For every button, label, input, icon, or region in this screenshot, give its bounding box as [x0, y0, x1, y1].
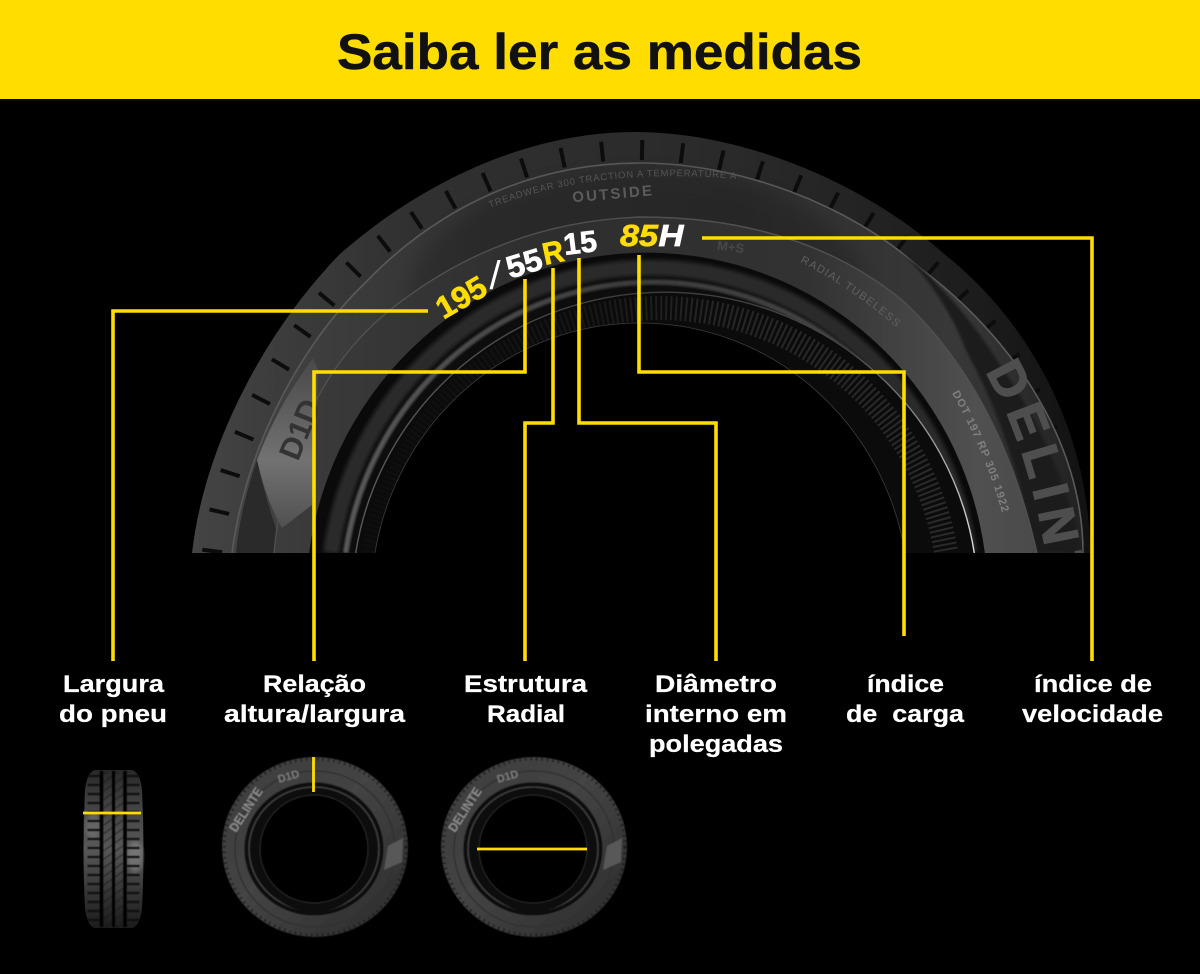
label: indice de carga: índice — [867, 671, 944, 698]
height line — [312, 757, 315, 792]
label: indice de velocidade — [1022, 671, 1163, 728]
line: estrutura — [525, 268, 553, 661]
label: diametro interno em polegadas — [645, 671, 787, 758]
tyre body — [222, 757, 408, 937]
size: 55: 55 — [502, 241, 546, 285]
rim inner gray band — [331, 268, 969, 553]
tyre body: DELINTE — [445, 784, 485, 835]
label: relacao altura/largura: altura/largura — [224, 701, 406, 728]
label: diametro interno em polegadas: Diâmetro — [655, 671, 777, 698]
top shading — [428, 261, 446, 281]
line: indice de carga — [639, 255, 904, 636]
line: relacao — [314, 279, 525, 661]
size code on sidewall — [430, 218, 684, 326]
label: diametro interno em polegadas: polegadas — [649, 731, 783, 758]
line: indice de velocidade — [702, 238, 1092, 661]
tyre body: D1D — [496, 768, 520, 786]
label: largura do pneu: Largura — [63, 671, 165, 698]
line: largura — [113, 311, 428, 661]
tread lugs — [212, 150, 1072, 553]
label: estrutura radial — [464, 671, 588, 728]
light wedge left — [257, 358, 318, 528]
line: diametro — [579, 258, 716, 661]
size: 15: 15 — [562, 225, 599, 262]
size: slash: / — [489, 254, 501, 298]
marking: D1D: D1D — [272, 394, 328, 465]
rim bright ring — [342, 278, 864, 553]
diameter line — [477, 848, 587, 850]
connector lines — [113, 238, 1092, 661]
shoulder highlights — [85, 812, 101, 840]
tyre body: D1D — [277, 768, 301, 786]
label: largura do pneu: do pneu — [59, 701, 167, 728]
icon: tyre side view with inner diameter line — [441, 757, 627, 937]
inner mesh liner — [518, 296, 958, 552]
label: relacao altura/largura: Relação — [263, 671, 366, 698]
size: H: H — [658, 218, 684, 253]
marking: treadwear: TREADWEAR 300 TRACTION A TEMPERATURE A — [488, 170, 736, 207]
rim second ring — [356, 292, 974, 553]
size: 195: 195 — [430, 269, 493, 326]
rim well — [309, 253, 985, 553]
marking: radial tubeless: RADIAL TUBELESS — [800, 256, 900, 326]
label: estrutura radial: Radial — [487, 701, 565, 728]
label: indice de velocidade: velocidade — [1022, 701, 1163, 728]
size: R: R — [539, 233, 567, 272]
size: 85: 85 — [620, 218, 659, 253]
tyre body: DELINTE — [226, 784, 266, 835]
label: relacao altura/largura — [224, 671, 406, 728]
title: Saiba ler as medidas — [337, 24, 862, 80]
tread pattern — [92, 771, 135, 927]
label: diametro interno em polegadas: interno em — [645, 701, 787, 728]
icon: tyre front view with width line — [83, 770, 144, 928]
main tyre arch photo — [192, 132, 1090, 553]
sidewall dark panel right — [902, 252, 1082, 553]
icon: tyre side view with sidewall height line — [222, 757, 408, 937]
tread band — [192, 132, 1090, 553]
label: largura do pneu — [59, 671, 167, 728]
tyre hole — [375, 323, 905, 553]
marking: dot code: DOT 197 RP 305 1922 — [952, 390, 1009, 512]
sidewall markings — [279, 170, 1082, 553]
marking: m+s: M+S — [716, 238, 745, 256]
label: indice de carga — [846, 671, 965, 728]
inner sidewall band — [274, 217, 1037, 553]
tyre body — [441, 757, 627, 937]
sidewall dark triangle left — [236, 460, 276, 553]
sidewall — [232, 163, 1083, 553]
label: estrutura radial: Estrutura — [464, 671, 588, 698]
marking: brand right: DELINTE — [986, 358, 1082, 553]
label: indice de velocidade: índice de — [1034, 671, 1152, 698]
marking: outside: OUTSIDE — [572, 182, 655, 206]
label: indice de carga: de carga — [846, 701, 965, 728]
width line — [83, 812, 141, 814]
header banner — [0, 0, 1200, 99]
